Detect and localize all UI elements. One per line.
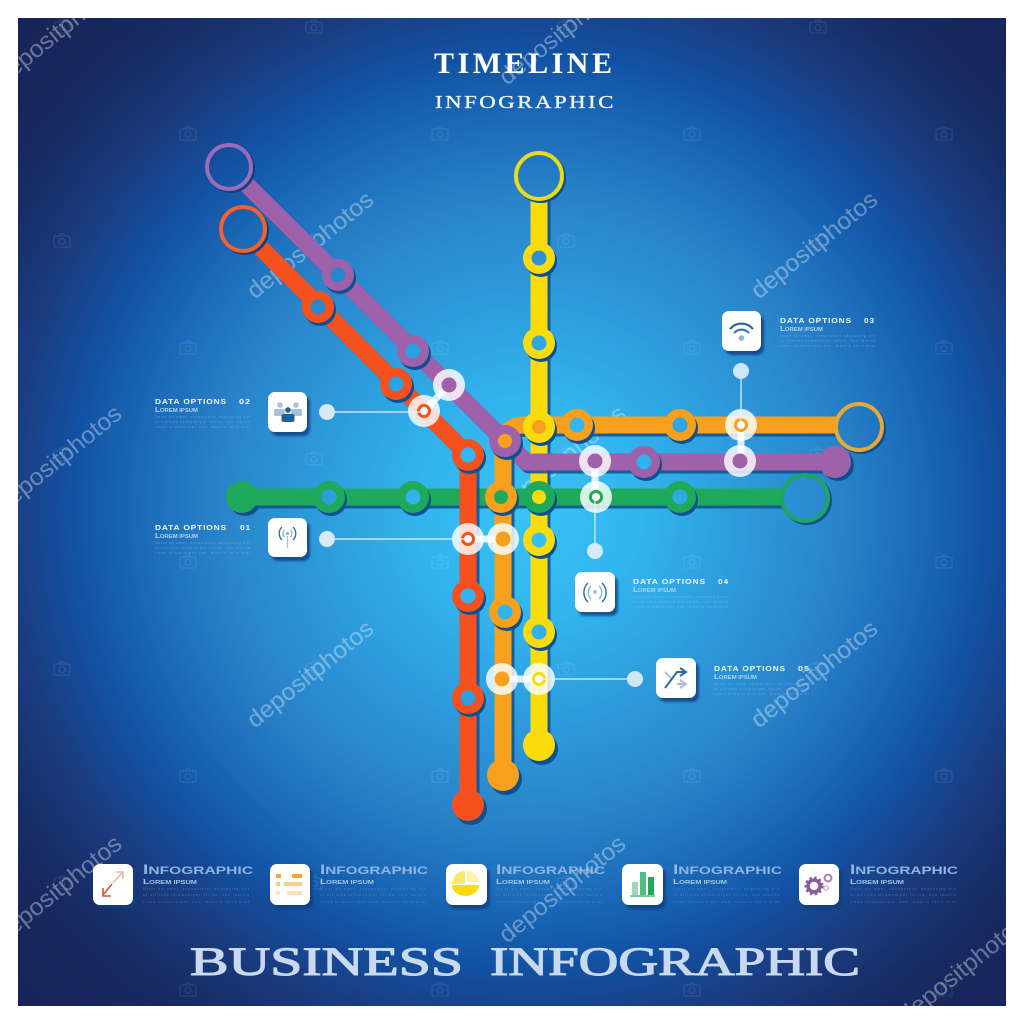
bottom text 5 [850,862,958,904]
bottom text 2: risus ullamcorper non, mauris felis erat [320,900,426,904]
label: data options 01: Dolor sit amet, consectetur adipiscing elit [155,541,250,545]
bottom text 2 [320,862,428,904]
label: data options 04: 04 [718,577,729,586]
bottom text 2: ut ultrices ullamcorper tellus, non iaculis [320,893,426,897]
label: data options 02: DATA OPTIONS [155,397,227,406]
connector: 01 [319,531,468,547]
connector: 02 [319,404,424,420]
bottom text 4: ut ultrices ullamcorper tellus, non iaculis [673,893,779,897]
label: data options 01: ut ultrices ullamcorper tellus, non iaculis [155,546,250,550]
bottom text 4: Dolor sit amet, consectetur adipiscing elit [673,887,779,891]
bottom text 2: INFOGRAPHIC [320,862,428,877]
label: data options 05: ut ultrices ullamcorper tellus, non iaculis [714,687,809,691]
bottom text 1 [143,862,253,904]
stations: regular [302,242,698,717]
line: green [226,481,803,516]
bottom text 3: L OREM IPSUM [496,877,551,886]
icon: signal 04 [575,572,615,612]
bottom text 2: Dolor sit amet, consectetur adipiscing elit [320,887,426,891]
bottom text 2: L OREM IPSUM [320,877,375,886]
label: data options 03 [780,316,875,348]
connector: 04 [587,497,603,559]
label: data options 04: LOREM IPSUM [633,585,676,594]
label: data options 02: ut ultrices ullamcorper tellus, non iaculis [155,420,250,424]
stations: highlighted [408,369,757,695]
label: data options 02: 02 [239,397,251,406]
bottom text 1: risus ullamcorper non, mauris felis erat [143,900,249,904]
bottom text 4 [673,862,782,904]
bottom text 5: ut ultrices ullamcorper tellus, non iaculis [850,893,956,897]
label: data options 04: risus ullamcorper non, mauris felis erat [633,605,728,609]
bottom text 3: INFOGRAPHIC [496,862,605,877]
label: data options 05: 05 [798,664,810,673]
bottom text 4: L OREM IPSUM [673,877,728,886]
label: data options 05: DATA OPTIONS [714,664,786,673]
bottom text 5: INFOGRAPHIC [850,862,958,877]
line: red [245,232,487,825]
bottom icon: gears [799,864,839,905]
bottom text 1: INFOGRAPHIC [143,862,253,877]
footer heading [190,939,860,984]
connector: 05 [539,671,643,687]
icon: shuffle [656,658,696,698]
bottom text 4: risus ullamcorper non, mauris felis erat [673,900,779,904]
bottom text 5: Dolor sit amet, consectetur adipiscing elit [850,887,956,891]
label: data options 02: risus ullamcorper non, mauris felis erat [155,425,250,429]
connector: 03 [733,363,749,425]
icon: antenna 01 [268,518,307,557]
bottom text 3: ut ultrices ullamcorper tellus, non iaculis [496,893,602,897]
label: data options 02: LOREM IPSUM [155,405,198,414]
label: data options 05: risus ullamcorper non, mauris felis erat [714,692,809,696]
bottom icon: bars [622,864,663,905]
watermarks: depositphotos [746,615,883,734]
line: orange vertical [487,445,522,795]
label: data options 01: risus ullamcorper non, mauris felis erat [155,551,250,555]
bottom text 3: risus ullamcorper non, mauris felis erat [496,900,602,904]
label: data options 02: Dolor sit amet, consectetur adipiscing elit [155,415,250,419]
bottom text 5: risus ullamcorper non, mauris felis erat [850,900,956,904]
watermarks: depositphotos [242,615,379,734]
watermarks: depositphotos [746,186,883,305]
bottom text 1: ut ultrices ullamcorper tellus, non iaculis [143,893,249,897]
label: data options 03: risus ullamcorper non, mauris felis erat [780,344,875,348]
bottom text 4: INFOGRAPHIC [673,862,782,877]
label: data options 01: DATA OPTIONS [155,523,227,532]
label: data options 03: LOREM IPSUM [780,324,823,333]
bottom icon: list [270,864,310,905]
label: data options 01 [155,523,251,555]
label: data options 04 [633,577,729,609]
label: data options 03: Dolor sit amet, consectetur adipiscing elit [780,334,875,338]
watermarks: depositphotos [494,830,631,949]
footer heading: BUSINESS [190,939,463,984]
terminal rings [207,145,884,523]
bottom text 3: Dolor sit amet, consectetur adipiscing elit [496,887,602,891]
label: data options 04: DATA OPTIONS [633,577,706,586]
bottom text 1: Dolor sit amet, consectetur adipiscing elit [143,887,249,891]
label: data options 03: DATA OPTIONS [780,316,852,325]
bottom text 5: L OREM IPSUM [850,877,905,886]
label: data options 03: ut ultrices ullamcorper tellus, non iaculis [780,339,875,343]
label: data options 01: LOREM IPSUM [155,531,198,540]
label: data options 03: 03 [864,316,875,325]
bottom text 1: L OREM IPSUM [143,877,198,886]
line: purple [232,170,854,481]
icon: people [268,392,307,432]
label: data options 05: Dolor sit amet, consectetur adipiscing elit [714,682,809,686]
label: data options 02 [155,397,251,429]
bottom text 3 [496,862,605,904]
label: data options 05: LOREM IPSUM [714,672,757,681]
bottom icon: arrows [93,864,133,905]
line: orange horizontal [503,425,858,448]
line: yellow [523,180,558,765]
bottom icon: pie [446,864,487,905]
label: data options 01: 01 [240,523,251,532]
label: data options 04: ut ultrices ullamcorper tellus, non iaculis [633,600,728,604]
footer heading: INFOGRAPHIC [490,939,860,984]
icon: wifi [722,311,761,351]
label: data options 05 [714,664,810,696]
title: TIMELINE [434,47,612,80]
watermarks: depositphotos [494,400,631,519]
watermarks: depositphotos [242,186,379,305]
subtitle: INFOGRAPHIC [435,92,616,112]
label: data options 04: Dolor sit amet, consectetur adipiscing elit [633,595,728,599]
